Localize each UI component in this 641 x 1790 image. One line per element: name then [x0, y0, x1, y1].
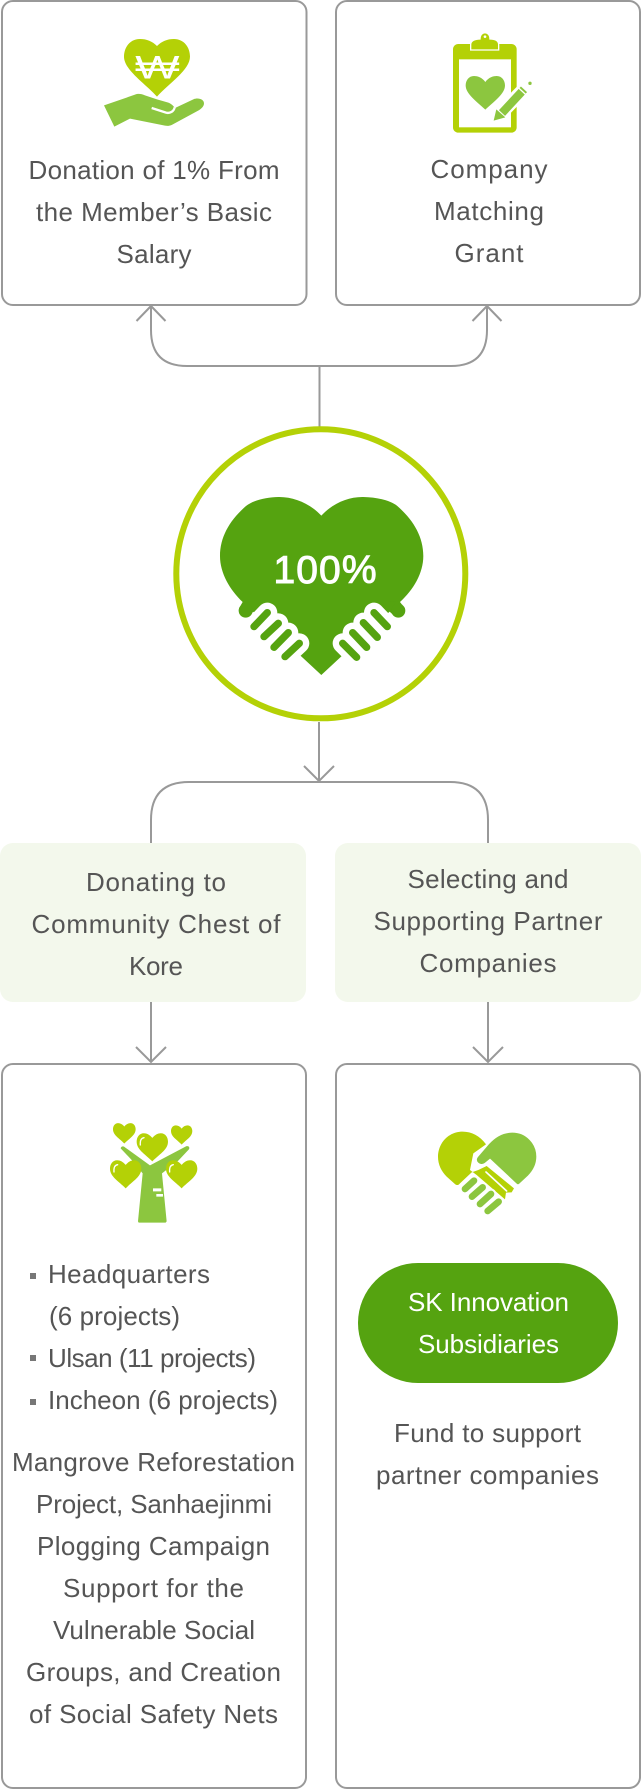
text: project description: [12, 1447, 295, 1729]
icon: hand holding heart with won sign: [104, 39, 204, 127]
icon: heart tree: [110, 1123, 197, 1223]
list: project locations: (6 projects): [49, 1301, 180, 1331]
text: fund description: [376, 1418, 599, 1490]
arrows: green boxes down to bottom cards: [136, 1002, 503, 1062]
list: project locations: Ulsan (11 projects): [48, 1343, 256, 1373]
central circle with heart: [176, 429, 465, 718]
text: project description: of Social Safety Nets: [29, 1699, 278, 1729]
panel: donating to community chest: [0, 843, 306, 1002]
text: project description: Groups, and Creation: [26, 1657, 281, 1687]
panel: selecting and supporting partners: Companies: [420, 948, 556, 978]
text: donation label: Salary: [116, 239, 192, 269]
text: matching label: Grant: [454, 238, 524, 268]
text: project description: Project, Sanhaejinmi: [36, 1489, 272, 1519]
panel: projects: [2, 1064, 306, 1788]
panel: SK Innovation subsidiaries: [336, 1064, 640, 1788]
text: 100%: 100%: [274, 549, 376, 592]
icon: clipboard with heart and pen: [453, 33, 532, 133]
list: project locations: Headquarters: [48, 1259, 210, 1289]
text: fund description: Fund to support: [394, 1418, 582, 1448]
list: project locations: Incheon (6 projects): [48, 1385, 278, 1415]
pill: SK Innovation subsidiaries: SK Innovation: [408, 1287, 569, 1317]
icon: hand holding heart with won sign: ₩: [135, 49, 180, 86]
text: matching label: Matching: [434, 196, 544, 226]
list: project locations: [30, 1259, 278, 1415]
panel: company matching grant: [336, 1, 640, 305]
panel: selecting and supporting partners: [335, 843, 641, 1002]
text: fund description: partner companies: [376, 1460, 599, 1490]
pill: SK Innovation subsidiaries: [358, 1263, 618, 1383]
icon: handshake heart: [438, 1132, 537, 1211]
panel: donation of 1%: [2, 1, 306, 305]
text: project description: Plogging Campaign: [37, 1531, 270, 1561]
text: matching label: Company: [430, 154, 548, 184]
text: donation label: the Member’s Basic: [36, 197, 272, 227]
text: project description: Vulnerable Social: [53, 1615, 255, 1645]
connector: circle up to top cards: [136, 306, 502, 428]
text: donation label: Donation of 1% From: [28, 155, 280, 185]
panel: selecting and supporting partners: Selecting and: [408, 864, 568, 894]
text: project description: Support for the: [63, 1573, 244, 1603]
panel: donating to community chest: Community Chest of: [32, 909, 281, 939]
text: project description: Mangrove Reforestation: [12, 1447, 295, 1477]
panel: donating to community chest: Kore: [129, 951, 183, 981]
connector: circle down to green boxes: [151, 722, 488, 843]
panel: selecting and supporting partners: Supporting Partner: [374, 906, 603, 936]
text: donation label: [28, 155, 280, 269]
panel: donating to community chest: Donating to: [86, 867, 226, 897]
text: matching label: [430, 154, 548, 268]
icon: heart with clasped hands: [220, 497, 423, 675]
pill: SK Innovation subsidiaries: Subsidiaries: [418, 1329, 559, 1359]
